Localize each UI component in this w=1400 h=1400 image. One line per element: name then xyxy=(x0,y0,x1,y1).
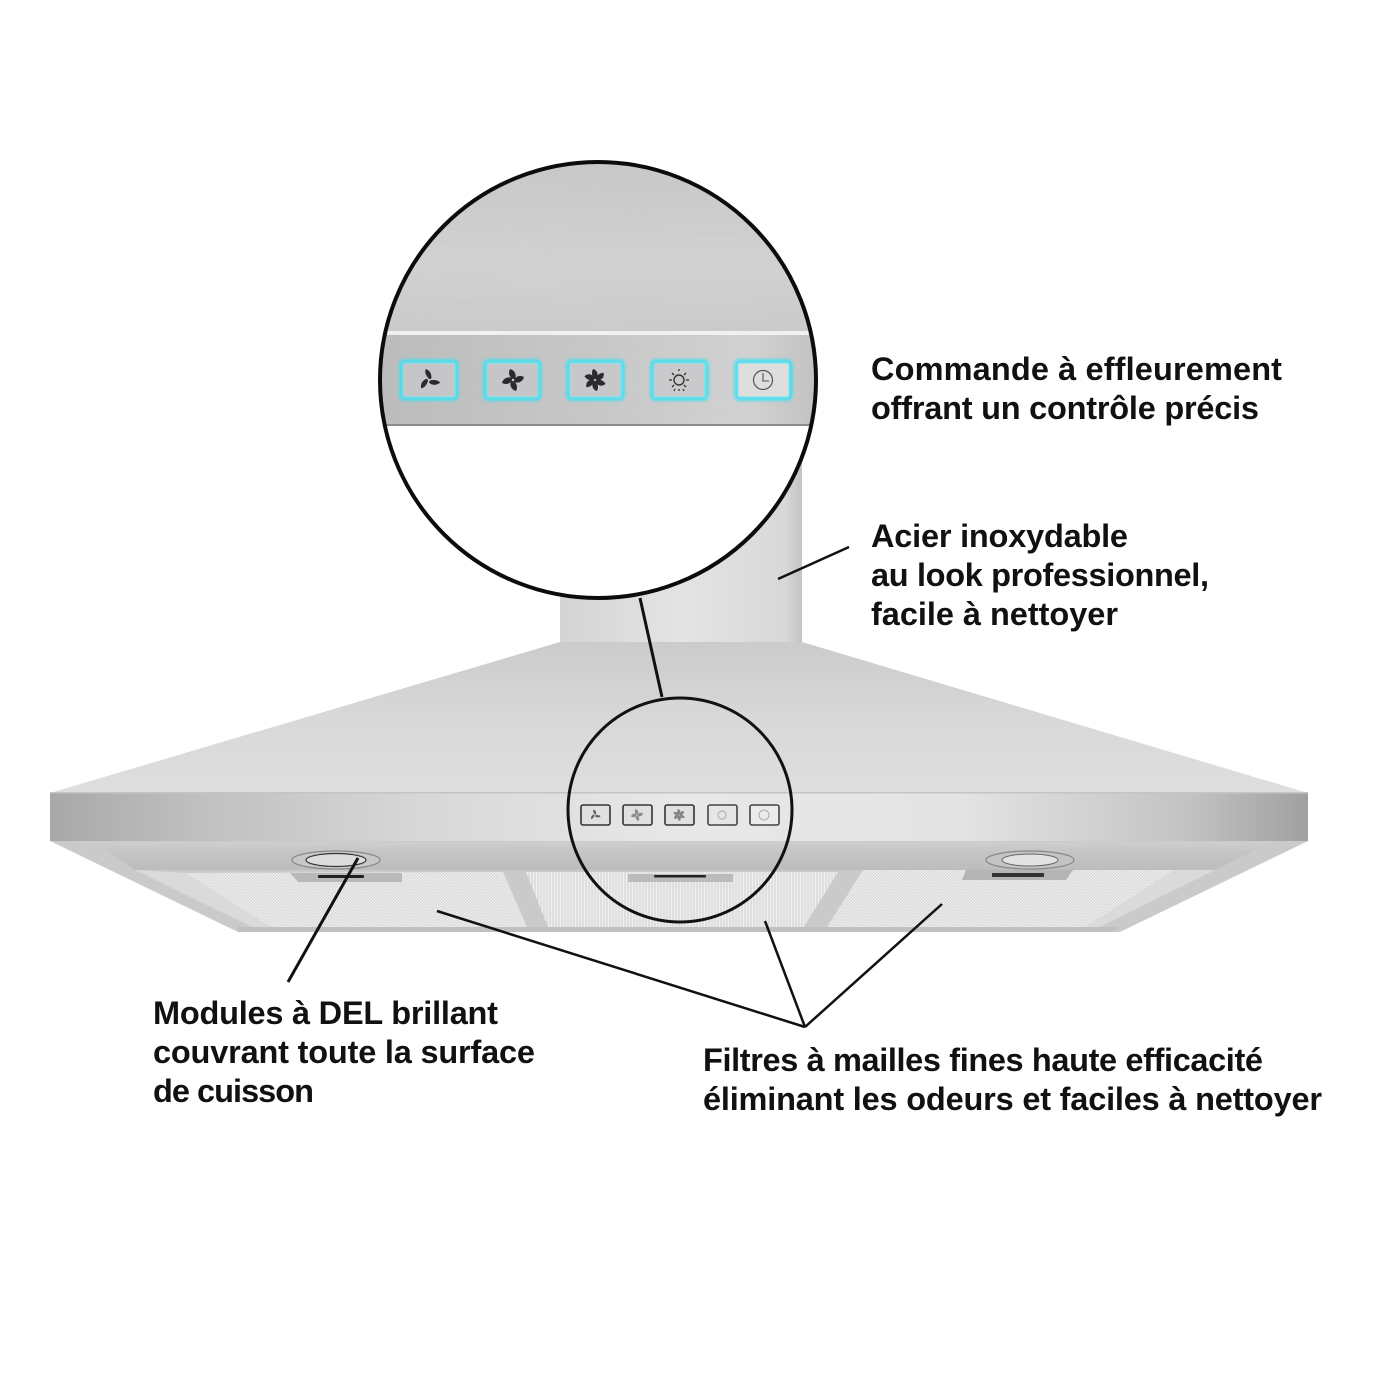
text: LED modules: Modules à DEL brillant xyxy=(153,995,498,1031)
underside xyxy=(50,841,1308,932)
text: filters: Filtres à mailles fines haute efficacité xyxy=(703,1042,1263,1078)
text: filters: éliminant les odeurs et faciles à nettoyer xyxy=(703,1081,1322,1117)
arrow line: stainless steel xyxy=(778,547,849,579)
inner lip left xyxy=(135,870,271,927)
circle outline xyxy=(380,162,816,598)
inner lip right xyxy=(1085,870,1215,927)
brushed steel upper surface xyxy=(378,160,818,332)
right light module xyxy=(986,851,1074,869)
connector between circles xyxy=(640,598,662,697)
small control buttons xyxy=(581,805,779,825)
touch button: fan medium xyxy=(487,363,538,397)
left light module xyxy=(292,851,380,869)
text: touch control: offrant un contrôle précis xyxy=(871,390,1259,426)
lower strip xyxy=(95,842,1272,870)
range hood xyxy=(50,440,1308,932)
arrow line: LED module xyxy=(288,858,358,982)
right bracket xyxy=(962,870,1073,880)
canopy xyxy=(50,642,1308,793)
text: touch control xyxy=(871,351,1282,426)
text: LED modules: couvrant toute la surface xyxy=(153,1034,535,1070)
brushed steel control band xyxy=(378,335,818,425)
text: LED modules: de cuisson xyxy=(153,1073,314,1109)
filter: right xyxy=(827,870,1174,927)
front rail xyxy=(238,927,1120,932)
text: touch control: Commande à effleurement xyxy=(871,351,1282,387)
text: stainless steel: Acier inoxydable xyxy=(871,518,1128,554)
middle bracket xyxy=(628,874,733,882)
left bracket xyxy=(290,873,402,882)
text: stainless steel xyxy=(871,518,1209,632)
filter: left xyxy=(185,872,527,927)
touch button: timer xyxy=(738,363,789,397)
text: stainless steel: au look professionnel, xyxy=(871,557,1209,593)
chimney xyxy=(560,440,802,643)
front band xyxy=(50,793,1308,841)
touch button glows xyxy=(402,362,790,398)
text: LED modules xyxy=(153,995,535,1109)
text: stainless steel: facile à nettoyer xyxy=(871,596,1118,632)
magnified control panel circle xyxy=(378,160,818,598)
arrow lines: filters xyxy=(437,904,942,1027)
touch button: fan high xyxy=(570,363,621,397)
touch button: fan low xyxy=(403,363,455,397)
small detail circle xyxy=(568,698,792,922)
text: filters xyxy=(703,1042,1322,1117)
filter: middle xyxy=(526,872,838,927)
touch button: light xyxy=(654,363,705,397)
band edge xyxy=(378,331,818,335)
